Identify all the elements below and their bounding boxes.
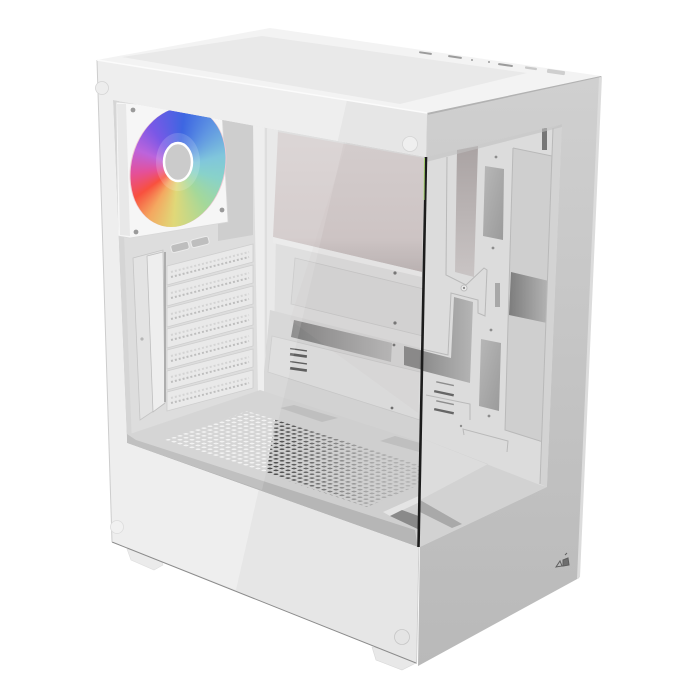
right side frame bbox=[418, 76, 602, 666]
rear wall panel bbox=[113, 100, 260, 443]
top panel of the case bbox=[97, 28, 601, 113]
top mesh panel bbox=[122, 36, 527, 104]
front panel left edge bbox=[97, 60, 112, 542]
drive bracket slots bbox=[290, 348, 307, 372]
floor front lip bbox=[127, 434, 418, 548]
floor cutouts bbox=[280, 405, 338, 422]
floor of the case bbox=[127, 390, 420, 546]
tray bridge with screw holes bbox=[391, 271, 397, 409]
front panel top edge bbox=[97, 60, 427, 113]
reflection over the interior bbox=[127, 237, 302, 490]
tray recess ledge bbox=[273, 237, 422, 277]
glass reflection on the frame bbox=[97, 60, 347, 590]
screw holes and connectors bbox=[434, 128, 547, 427]
fan assembly bbox=[116, 102, 228, 238]
gray area behind the fan bbox=[218, 110, 253, 241]
motherboard tray bbox=[281, 130, 424, 157]
perforated mesh, light part bbox=[166, 411, 275, 472]
lower tray body bbox=[264, 310, 274, 394]
inner frame return bbox=[540, 124, 562, 487]
screw bottom left bbox=[110, 520, 124, 534]
screw top right bbox=[402, 136, 418, 152]
PCI slot cover stack bbox=[167, 244, 253, 411]
front I/O ports bbox=[419, 51, 565, 75]
front right foot bbox=[372, 647, 416, 670]
tray ridge outlines bbox=[424, 148, 552, 452]
large side cutout bbox=[509, 272, 549, 323]
raised tray panel bbox=[505, 148, 552, 442]
lower cutout bbox=[479, 339, 501, 411]
cable cutout tall top bbox=[455, 146, 478, 277]
front glass panel with frame bbox=[97, 60, 428, 664]
glass edge black line bbox=[418, 157, 426, 547]
interior floor on the right bbox=[420, 454, 546, 546]
tint right of the reflection bbox=[290, 142, 426, 413]
RGB fan bbox=[120, 98, 240, 238]
rear left foot bbox=[127, 549, 163, 570]
fan hub bbox=[164, 143, 192, 181]
interior seen through the front glass bbox=[113, 100, 425, 546]
interior seen through the side opening bbox=[420, 128, 560, 547]
dark shroud slot bbox=[390, 510, 418, 529]
perforated mesh, dark part bbox=[266, 420, 419, 507]
shroud top plate bbox=[384, 496, 418, 516]
lower tray panel bbox=[291, 258, 424, 336]
screw top left bbox=[96, 82, 108, 94]
lower panel outline bbox=[268, 336, 424, 420]
expansion bracket vertical bars bbox=[133, 250, 166, 420]
vent pills above the slots bbox=[170, 236, 210, 253]
vertical rear tray edge bbox=[254, 142, 264, 392]
cable cutout rounded bbox=[483, 166, 504, 240]
screw bottom right bbox=[394, 630, 410, 644]
front panel bottom edge bbox=[112, 542, 416, 663]
shadow under the top edge bbox=[426, 124, 562, 162]
fan center glow bbox=[156, 133, 200, 191]
icon: brand logo on side panel bbox=[556, 553, 569, 567]
floor slot on the right bbox=[420, 500, 462, 528]
left inner wall bbox=[113, 100, 132, 445]
fan frame bbox=[116, 102, 228, 238]
L shaped cutout bbox=[423, 297, 473, 383]
cutout left of the edge bbox=[291, 320, 392, 362]
large tray cutout bbox=[273, 132, 424, 272]
